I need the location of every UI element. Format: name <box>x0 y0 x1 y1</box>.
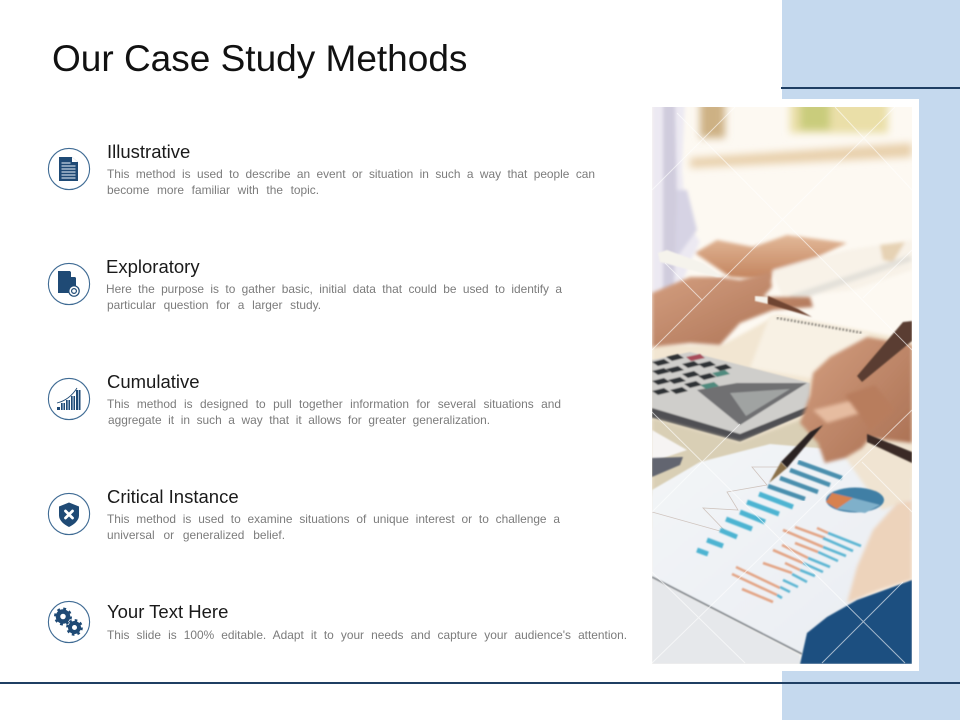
dark pens <box>857 321 912 382</box>
description <box>107 512 560 542</box>
table shadow <box>652 416 820 492</box>
item: Illustrative <box>48 141 595 197</box>
description: aggregate it in such a way that it allows for greater generalization. <box>108 413 490 427</box>
item: Cumulative <box>48 371 561 427</box>
paper <box>652 444 912 654</box>
heading: Exploratory <box>106 256 200 277</box>
white pen <box>658 250 723 277</box>
panel: white photo frame <box>645 99 919 671</box>
white diagonal lines <box>652 107 912 663</box>
panel: light blue side band <box>782 0 960 720</box>
icon: growth chart <box>48 378 90 420</box>
top rule <box>781 87 960 89</box>
desk and notebook <box>652 314 912 448</box>
icon: document search <box>48 262 90 306</box>
heading: Illustrative <box>107 141 190 162</box>
heading: Critical Instance <box>107 486 239 507</box>
description: This method is designed to pull together information for several situations and <box>107 397 561 411</box>
trend line <box>652 467 783 533</box>
description: universal or generalized belief. <box>107 528 285 542</box>
heading: Your Text Here <box>107 601 228 622</box>
right hand holding pen <box>800 337 912 463</box>
lower hand and sleeve <box>847 500 912 603</box>
icon: shield with cross <box>48 492 90 536</box>
item: Exploratory <box>48 256 562 312</box>
description <box>107 397 561 427</box>
description: become more familiar with the topic. <box>107 183 319 197</box>
description: This method is used to describe an event or situation in such a way that people can <box>107 167 595 181</box>
description <box>107 167 595 197</box>
icon: gears <box>48 600 90 644</box>
description <box>106 282 562 312</box>
photo: hands working on financial charts with calculator <box>652 107 912 664</box>
description: particular question for a larger study. <box>107 298 321 312</box>
orange and blue bars <box>732 527 861 602</box>
calculator <box>652 352 810 442</box>
title: Our Case Study Methods <box>52 38 467 79</box>
description: This method is used to examine situations of unique interest or to challenge a <box>107 512 560 526</box>
icon: document <box>48 148 90 190</box>
bottom rule <box>0 682 960 684</box>
notes at left <box>652 430 687 462</box>
item: Critical Instance <box>48 486 560 542</box>
pie chart <box>826 488 884 513</box>
item: Your Text Here <box>48 600 627 644</box>
heading: Cumulative <box>107 371 200 392</box>
lower hand holding pen <box>652 272 813 347</box>
blue bar chart <box>697 494 793 554</box>
description: Here the purpose is to gather basic, initial data that could be used to identify a <box>106 282 562 296</box>
description: This slide is 100% editable. Adapt it to your needs and capture your audience's attention. <box>107 628 627 642</box>
